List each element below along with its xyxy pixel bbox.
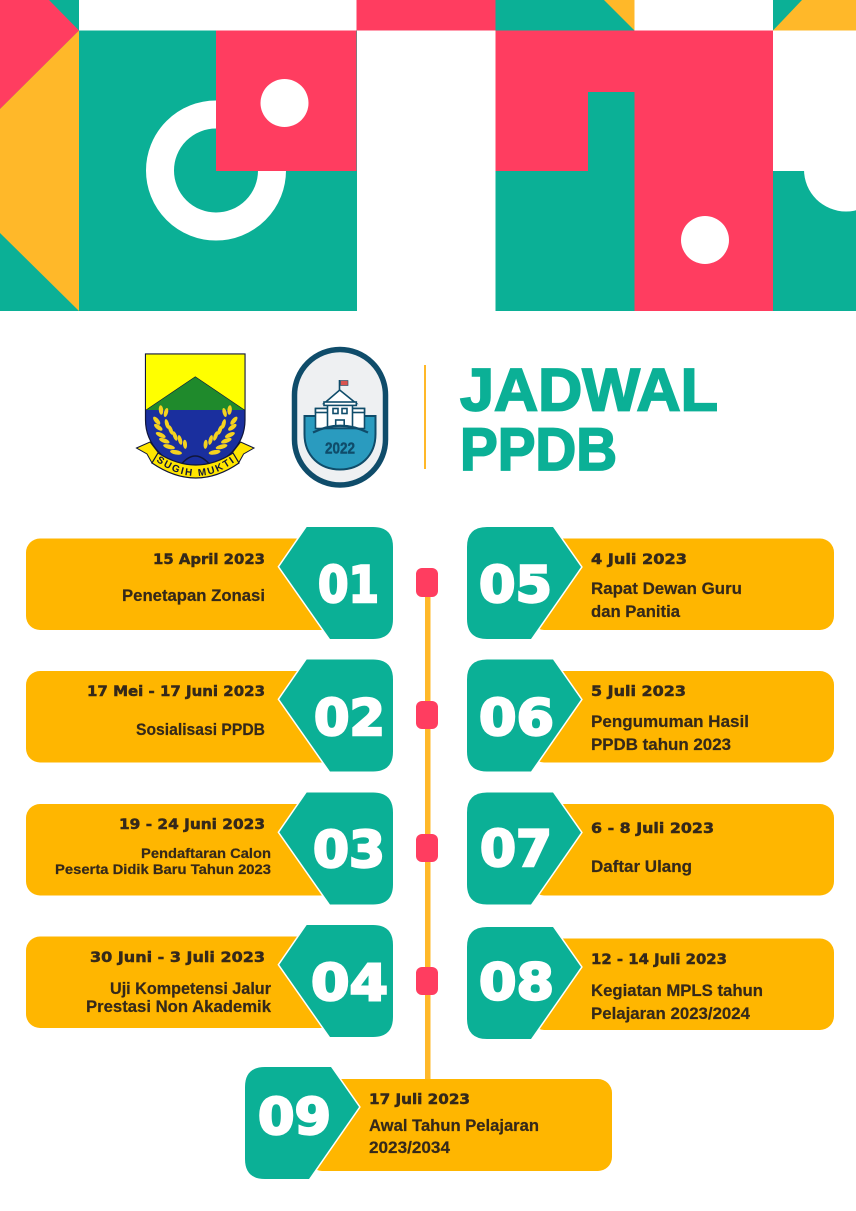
step 04: 30 Juni - 3 Juli 2023 (90, 950, 265, 966)
step 08: Pelajaran 2023/2024 (591, 1005, 751, 1023)
crest shield (146, 354, 245, 472)
step 03: Pendaftaran Calon (141, 845, 271, 861)
crest motto: SUGIH MUKTI (157, 456, 234, 476)
timeline marker 1 (416, 568, 438, 597)
step 03: 03 (313, 821, 385, 879)
header: far right teal tile with half circle (773, 128, 856, 311)
crest wheat sprigs (152, 405, 239, 456)
step 06: 5 Juli 2023 (591, 684, 686, 700)
header: top right corner tile (773, 0, 856, 30)
logo: school badge 2022 (294, 350, 386, 485)
badge flag (340, 380, 348, 386)
title: JADWAL (460, 356, 718, 424)
step 06: Pengumuman Hasil (591, 713, 749, 731)
timeline marker 4 (416, 967, 438, 995)
badge shield (304, 416, 376, 470)
title (460, 356, 718, 483)
step 08 (467, 927, 834, 1039)
step 05: dan Panitia (591, 603, 681, 621)
title divider (424, 365, 426, 469)
step 09: 17 Juli 2023 (369, 1092, 470, 1108)
timeline marker 3 (416, 834, 438, 862)
header: left triangle column (0, 0, 79, 311)
step 05: Rapat Dewan Guru (591, 580, 742, 598)
step 07: 07 (480, 820, 552, 878)
step 03: Peserta Didik Baru Tahun 2023 (55, 861, 271, 877)
step 06: PPDB tahun 2023 (591, 736, 731, 754)
header: teal block with ring and red square (79, 30, 357, 311)
step 05 (467, 527, 834, 639)
step 05: 05 (479, 556, 552, 614)
header: top red strip (356, 0, 496, 30)
step 02 (26, 660, 393, 772)
badge year: 2022 (325, 440, 355, 457)
step 09 (245, 1067, 612, 1179)
step 04: Uji Kompetensi Jalur (110, 980, 272, 998)
step 02: 02 (314, 689, 385, 747)
step 01: 01 (318, 556, 379, 614)
step 05: 4 Juli 2023 (591, 552, 687, 568)
step 09: 2023/2034 (369, 1139, 451, 1157)
step 04 (26, 925, 393, 1037)
badge ground line (313, 426, 368, 432)
step 08: Kegiatan MPLS tahun (591, 982, 763, 1000)
timeline marker 2 (416, 701, 438, 729)
timeline line (425, 590, 430, 1080)
step 09: Awal Tahun Pelajaran (369, 1117, 539, 1135)
step 03: 19 - 24 Juni 2023 (119, 817, 265, 833)
step 07: Daftar Ulang (591, 858, 692, 876)
step 08: 12 - 14 Juli 2023 (591, 952, 727, 968)
step 01 (26, 527, 393, 639)
step 03 (26, 792, 393, 904)
step 09: 09 (258, 1088, 331, 1146)
geometric header banner (0, 0, 856, 311)
logo: regency crest (136, 353, 255, 479)
step 06 (467, 660, 834, 772)
step 02: Sosialisasi PPDB (136, 721, 265, 739)
step 01: Penetapan Zonasi (122, 587, 265, 605)
step 04: Prestasi Non Akademik (86, 998, 272, 1016)
badge school building (316, 380, 364, 428)
header: right red and teal block (496, 30, 773, 311)
step 07: 6 - 8 Juli 2023 (591, 821, 714, 837)
step 06: 06 (479, 689, 554, 747)
header: top teal strip with yellow corner (496, 0, 634, 30)
step 04: 04 (311, 954, 388, 1012)
step 01: 15 April 2023 (153, 552, 265, 568)
timeline (416, 568, 438, 1080)
step 02: 17 Mei - 17 Juni 2023 (87, 684, 265, 700)
title: PPDB (460, 416, 617, 483)
step 07 (467, 792, 834, 904)
step 08: 08 (479, 954, 554, 1012)
badge capsule (294, 350, 386, 485)
